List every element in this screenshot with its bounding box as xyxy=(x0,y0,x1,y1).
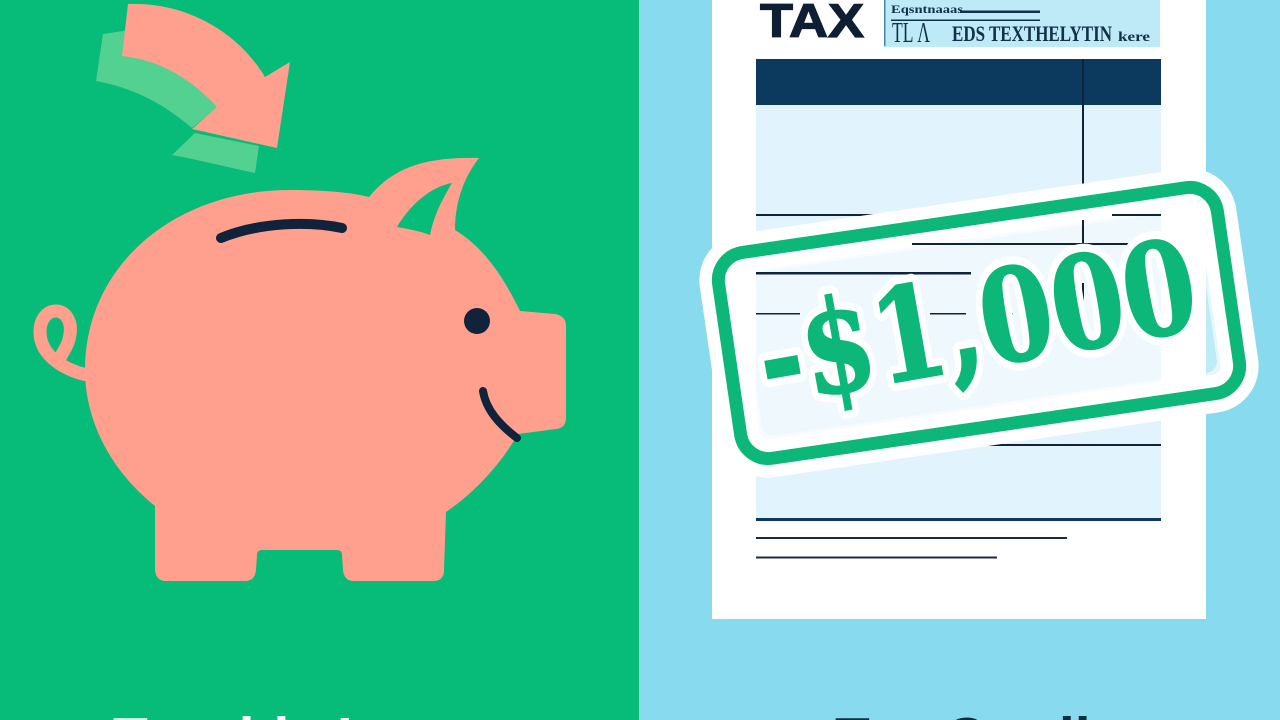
form header field: TL Λ xyxy=(892,17,930,49)
icon: curved deposit arrow xyxy=(96,4,290,173)
form header field xyxy=(884,0,1160,49)
icon: piggy bank xyxy=(40,158,566,581)
form header field: kere xyxy=(1118,30,1150,45)
form header field: EDS TEXTHELYTIN xyxy=(952,21,1112,46)
form table xyxy=(756,59,1161,558)
stamp: -$1,000 xyxy=(715,184,1243,462)
stamp backing xyxy=(715,184,1243,462)
table lines showing through stamp xyxy=(756,214,1161,314)
panel: tax credit xyxy=(639,0,1280,720)
panel: taxable income xyxy=(0,0,639,720)
form header field: Eqsntnaaas xyxy=(891,2,963,16)
tax form document xyxy=(712,0,1206,619)
stamp border xyxy=(715,184,1243,462)
